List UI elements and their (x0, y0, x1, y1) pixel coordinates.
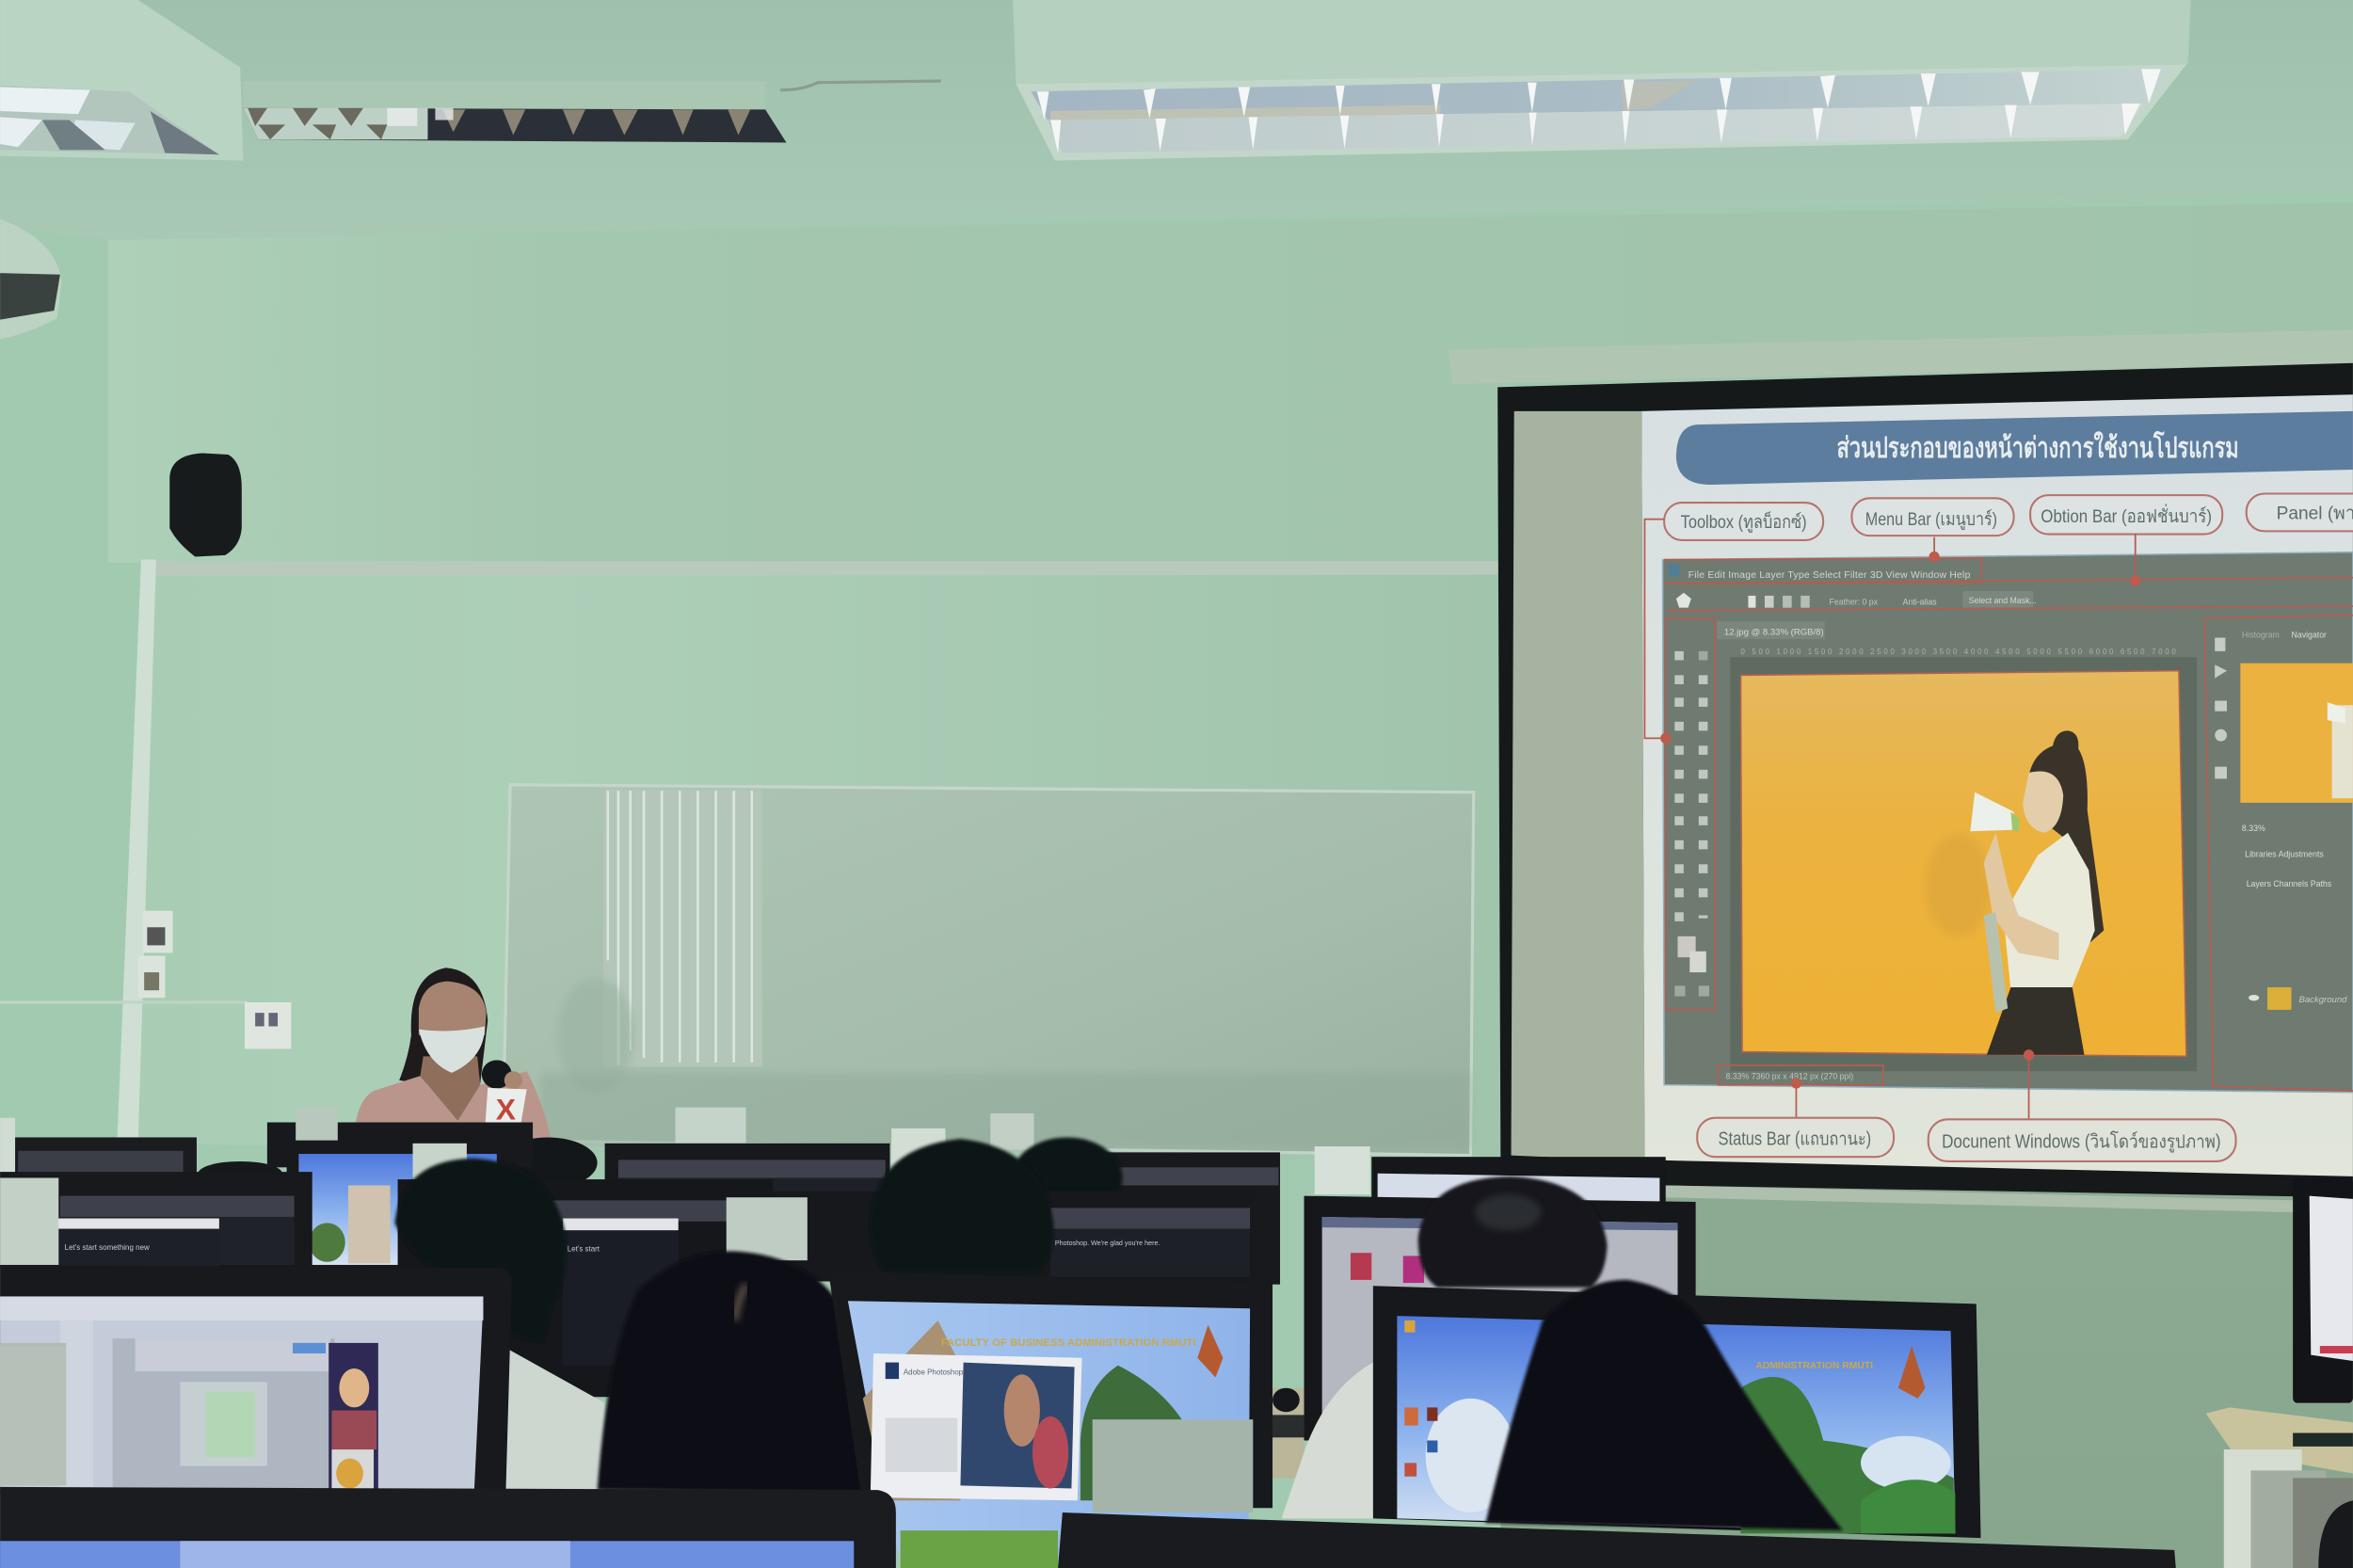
stand in front (0, 1348, 66, 1485)
label: document windows (1929, 1119, 2236, 1161)
monitor: middle center-left: Let's start (568, 1245, 600, 1254)
woman with megaphone (1926, 730, 2104, 1055)
back heads (1012, 1137, 1123, 1219)
right monitor (2293, 1177, 2353, 1403)
panel tabs: layers: Layers Channels Paths (2247, 879, 2332, 888)
rail below the screen (1666, 1185, 2296, 1212)
option bar (1676, 591, 2037, 608)
label: option bar: Obtion Bar (ออฟชั่นบาร์) (2041, 504, 2212, 527)
monitor: back center (605, 1144, 889, 1278)
foremost monitor right (1058, 1512, 2176, 1568)
monitor: middle center-left (398, 1179, 869, 1397)
navigator tab: Navigator (2292, 631, 2327, 640)
red callout lines (1644, 520, 2353, 1119)
monitor: middle center: Photoshop. We're glad you're here. (1055, 1240, 1160, 1247)
glass board (503, 785, 1474, 1156)
monitor: front left (0, 1265, 512, 1493)
option bar: Feather: 0 px (1830, 597, 1879, 606)
wall sockets (0, 911, 291, 1048)
monitor: back right (1371, 1157, 1666, 1209)
air conditioner (0, 219, 61, 339)
photoshop splash card: Adobe Photoshop (904, 1368, 964, 1376)
label: menu bar: Menu Bar (เมนูบาร์) (1865, 508, 1997, 530)
ceiling light: far left (0, 0, 243, 161)
menu bar (1669, 564, 1971, 581)
ruler: 0 500 1000 1500 2000 2500 3000 3500 4000 4500 5000 5500 6000 6500 7000 (1740, 648, 2176, 656)
paper divider front center (1093, 1419, 1253, 1512)
monitor: middle left (0, 1172, 312, 1268)
ceiling light: right (1013, 0, 2191, 161)
monitor: back left with wallpaper (287, 1137, 512, 1272)
label: panel (2247, 494, 2353, 531)
monitor: middle center (773, 1192, 1253, 1281)
monitor: back center right (1103, 1152, 1280, 1285)
monitor: front center (828, 1271, 1273, 1568)
label: option bar (2030, 495, 2222, 535)
label: status bar: Status Bar (แถบถานะ) (1719, 1128, 1871, 1149)
projected slide (1641, 394, 2353, 1176)
option bar: Select and Mask... (1969, 596, 2037, 605)
paper dividers middle (0, 1177, 808, 1265)
tool icons (1674, 651, 1709, 997)
label: toolbox (1664, 503, 1823, 540)
head behind back row (199, 1161, 282, 1185)
monitor: front right: ADMINISTRATION RMUTI (1755, 1361, 1873, 1371)
red X sign (485, 1088, 527, 1133)
monitor: back far left (15, 1137, 197, 1182)
red callout dots (1660, 552, 2140, 1089)
whiteboard top rail (141, 561, 1497, 576)
photoshop window (1644, 520, 2353, 1119)
whiteboard surface (132, 575, 1500, 1163)
right dock icons (2215, 638, 2227, 778)
panel tabs: libraries: Libraries Adjustments (2245, 849, 2324, 858)
ceiling (0, 0, 2353, 240)
back row monitors (15, 1123, 1666, 1285)
student head: center (871, 1139, 1053, 1272)
tab text: 12.jpg @ 8.33% (RGB/8) (1724, 627, 1824, 637)
panel labels: 8.33% (2242, 824, 2265, 833)
student: right (1282, 1176, 1608, 1518)
label: menu bar (1851, 498, 2014, 536)
yellow photo (1740, 671, 2186, 1056)
student: front right long hair (1485, 1280, 1843, 1530)
wall speaker (169, 453, 242, 556)
desk and mouse (1268, 1388, 1305, 1478)
layer row: Background (2299, 995, 2347, 1005)
monitor: front right (1373, 1286, 1981, 1538)
monitor: teacher desk (267, 1123, 533, 1167)
red X sign: X (496, 1092, 516, 1126)
monitor: front center: FACULTY OF BUSINESS ADMINISTRATION RMUTI (941, 1337, 1196, 1349)
upper wall (108, 202, 2353, 563)
monitor: right middle (1305, 1196, 1696, 1440)
label: status bar (1697, 1118, 1894, 1157)
layer row (2249, 987, 2347, 1010)
tab (1717, 621, 1825, 639)
monitor: middle left: Let's start something new (65, 1243, 150, 1252)
slide title (1676, 411, 2353, 485)
navigator preview (2240, 664, 2353, 803)
teacher (356, 968, 551, 1139)
paper dividers back (0, 1108, 1370, 1194)
ceiling light: middle (243, 81, 941, 142)
label: document windows: Docunent Windows (วินโดว์ของรูปภาพ) (1942, 1131, 2221, 1154)
status bar text: 8.33% 7360 px x 4912 px (270 ppi) (1725, 1071, 1853, 1080)
head behind back row center (498, 1137, 598, 1189)
lower right wall (1500, 578, 2353, 1568)
right desk (2206, 1407, 2353, 1568)
projector screen casing (1449, 330, 2353, 384)
navigator panel tabs: Histogram (2242, 631, 2280, 640)
photoshop splash card (871, 1353, 1082, 1500)
middle row monitors (0, 1172, 1253, 1397)
canvas surround (1730, 657, 2197, 1071)
label: toolbox: Toolbox (ทูลบ็อกซ์) (1681, 510, 1807, 533)
option bar: Anti-alias (1903, 597, 1937, 606)
whiteboard left rail (117, 560, 156, 1141)
projector screen grey margin (1512, 411, 1644, 1161)
menu bar: File Edit Image Layer Type Select Filter 3D View Window Help (1689, 570, 1971, 581)
foremost monitor left (0, 1487, 896, 1568)
student: front left long hair (598, 1251, 868, 1493)
projector screen frame (1497, 363, 2353, 1197)
student head: left (394, 1159, 605, 1493)
